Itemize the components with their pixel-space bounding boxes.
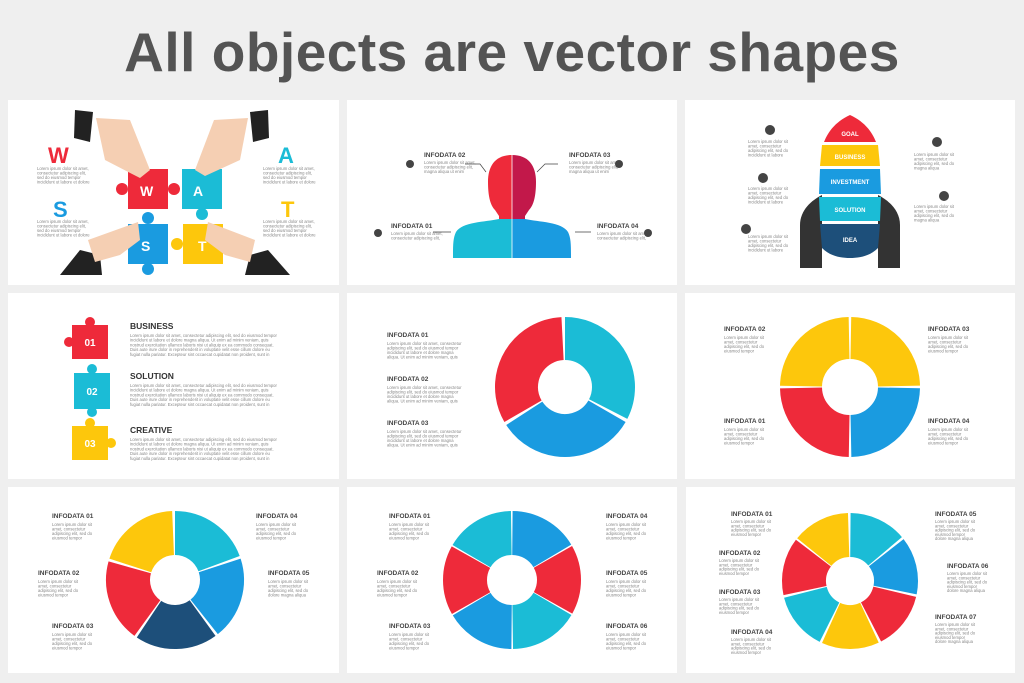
labels: INFODATA 04 — [597, 223, 639, 230]
labels: Lorem ipsum dolor sit — [928, 427, 968, 432]
labels — [38, 513, 310, 650]
labels: INFODATA 05 — [606, 570, 648, 577]
labels: INFODATA 03 — [928, 326, 970, 333]
labels: adipiscing elit, sed do — [731, 646, 772, 651]
labels: Lorem ipsum dolor sit amet, consectetur — [387, 429, 461, 434]
labels: amet, consectetur — [928, 340, 962, 344]
swot text: Lorem ipsum dolor sit amet, — [263, 166, 315, 171]
swot text — [37, 166, 316, 238]
labels: adipiscing elit, sed do — [928, 344, 969, 349]
swot text: incididunt ut labore et dolore — [37, 180, 90, 184]
labels: INFODATA 02 — [719, 550, 761, 557]
rocket text: incididunt ut labore — [748, 248, 784, 252]
swot text: incididunt ut labore et dolore — [263, 180, 316, 184]
panel: head silhouette — [347, 100, 677, 285]
labels: eiusmod tempor — [935, 532, 966, 537]
labels: INFODATA 05 — [935, 511, 977, 518]
labels: eiusmod tempor — [724, 440, 755, 446]
labels: Lorem ipsum dolor sit — [731, 637, 771, 642]
labels: eiusmod tempor — [928, 348, 959, 354]
labels: INFODATA 02 — [387, 376, 429, 383]
puzzle pieces: W — [140, 183, 154, 199]
labels: consectetur adipiscing elit, — [424, 164, 473, 170]
donut 5 — [109, 514, 241, 646]
labels: Lorem ipsum dolor sit — [935, 519, 975, 524]
labels: eiusmod tempor — [389, 646, 420, 650]
labels: Lorem ipsum dolor sit — [38, 579, 78, 584]
swot text: consectetur adipiscing elit, — [263, 170, 312, 176]
swot letters: W — [48, 143, 69, 168]
labels: Lorem ipsum dolor sit — [256, 522, 296, 527]
labels: Lorem ipsum dolor sit — [377, 579, 417, 584]
labels: INFODATA 04 — [731, 629, 773, 636]
swot text: sed do eiusmod tempor — [37, 228, 81, 233]
rocket text: amet, consectetur — [914, 156, 948, 162]
labels: adipiscing elit, sed do — [268, 588, 309, 593]
labels: eiusmod tempor — [52, 646, 83, 650]
headings and text: Duis aute irure dolor in reprehenderit in voluptate velit esse cillum dolore eu — [130, 347, 271, 352]
rocket text: magna aliqua — [914, 166, 940, 170]
labels — [719, 511, 989, 655]
labels: magna aliqua ut enim — [424, 169, 465, 174]
labels: consectetur adipiscing elit, — [569, 164, 618, 170]
rocket text — [748, 139, 955, 252]
labels: consectetur adipiscing elit, — [597, 236, 646, 240]
labels: Lorem ipsum dolor sit amet, — [391, 231, 443, 236]
labels: aliqua. Ut enim ad minim veniam, quis — [387, 398, 458, 404]
labels: INFODATA 04 — [928, 418, 970, 425]
swot text: Lorem ipsum dolor sit amet, — [37, 219, 89, 224]
puzzle pieces: S — [141, 238, 150, 254]
labels: amet, consectetur — [377, 584, 411, 588]
puzzle pieces — [116, 169, 223, 275]
labels: amet, consectetur — [389, 636, 423, 642]
rocket text: adipiscing elit, sed do — [914, 161, 955, 166]
labels: Lorem ipsum dolor sit — [935, 622, 975, 627]
labels: Lorem ipsum dolor sit — [606, 579, 646, 584]
labels: Lorem ipsum dolor sit — [731, 519, 771, 524]
headings and text: fugiat nulla pariatur. Excepteur sint occaecat cupidatat non proident, sunt in — [130, 352, 270, 357]
headings and text: nostrud exercitation ullamco laboris nisi ut aliquip ex ea commodo consequat. — [130, 342, 274, 347]
head figure — [453, 155, 571, 258]
labels: eiusmod tempor — [389, 536, 420, 540]
rocket text: adipiscing elit, sed do — [748, 243, 789, 248]
labels: amet, consectetur — [724, 432, 758, 436]
labels: INFODATA 01 — [387, 332, 429, 339]
rocket text: adipiscing elit, sed do — [748, 195, 789, 200]
headings and text: nostrud exercitation ullamco laboris nisi ut aliquip ex ea commodo consequat. — [130, 446, 274, 451]
headings and text: nostrud exercitation ullamco laboris nisi ut aliquip ex ea commodo consequat. — [130, 392, 274, 397]
swot text: consectetur adipiscing elit, — [37, 224, 86, 228]
swot text: Lorem ipsum dolor sit amet, — [263, 219, 315, 224]
labels: INFODATA 03 — [719, 589, 761, 596]
labels: aliqua. Ut enim ad minim veniam, quis — [387, 354, 458, 360]
labels: eiusmod tempor — [719, 610, 750, 615]
headings and text: incididunt ut labore et dolore magna aliqua. Ut enim ad minim veniam, quis — [130, 388, 268, 393]
labels: Lorem ipsum dolor sit — [719, 558, 759, 563]
headings and text: Lorem ipsum dolor sit amet, consectetur adipiscing elit, sed do eiusmod tempor — [130, 437, 277, 442]
panel: 6-part donut — [347, 487, 677, 673]
labels: Lorem ipsum dolor sit — [947, 571, 987, 576]
panel: 3-part donut — [347, 293, 677, 479]
panel: 7-part donut — [686, 487, 1015, 673]
labels: eiusmod tempor — [606, 536, 637, 540]
labels: dolore magna aliqua — [268, 592, 307, 598]
labels: INFODATA 06 — [947, 563, 989, 570]
labels: adipiscing elit, sed do — [606, 531, 647, 536]
labels: adipiscing elit, sed do — [935, 528, 976, 533]
rocket text: Lorem ipsum dolor sit — [914, 204, 954, 209]
labels: Lorem ipsum dolor sit — [606, 522, 646, 527]
rocket: INVESTMENT — [831, 180, 870, 186]
labels: amet, consectetur — [935, 523, 969, 528]
labels: INFODATA 03 — [569, 152, 611, 159]
labels: eiusmod tempor — [731, 650, 762, 655]
swot text: incididunt ut labore et dolore — [263, 232, 316, 238]
labels: amet, consectetur — [606, 636, 640, 642]
labels: INFODATA 05 — [268, 570, 310, 577]
swot text: consectetur adipiscing elit, — [37, 170, 86, 176]
labels: Lorem ipsum dolor sit — [52, 632, 92, 637]
headings and text: Duis aute irure dolor in reprehenderit in voluptate velit esse cillum dolore eu — [130, 397, 271, 402]
labels: dolore magna aliqua — [935, 639, 974, 644]
labels: eiusmod tempor — [606, 592, 637, 598]
rocket text: Lorem ipsum dolor sit — [748, 186, 788, 191]
labels: amet, consectetur — [606, 584, 640, 588]
labels: adipiscing elit, sed do — [724, 436, 765, 441]
labels: adipiscing elit, sed do — [38, 588, 79, 593]
swot text: sed do eiusmod tempor — [37, 175, 81, 180]
puzzle icons — [64, 317, 116, 460]
swot text: Lorem ipsum dolor sit amet, — [37, 166, 89, 171]
labels: eiusmod tempor — [947, 584, 978, 589]
rocket text: Lorem ipsum dolor sit — [748, 139, 788, 144]
labels: amet, consectetur — [731, 641, 765, 646]
swot letters: A — [278, 143, 294, 168]
labels: INFODATA 02 — [724, 326, 766, 333]
labels: Lorem ipsum dolor sit — [928, 335, 968, 340]
headings and text — [130, 321, 277, 461]
labels: adipiscing elit, sed do — [606, 588, 647, 593]
donut 3 — [499, 321, 631, 453]
labels: adipiscing elit, sed do — [389, 641, 430, 646]
panel: 5-part donut — [8, 487, 339, 673]
labels: Lorem ipsum dolor sit — [389, 632, 429, 637]
labels: Lorem ipsum dolor sit — [724, 427, 764, 432]
rocket text: Lorem ipsum dolor sit — [914, 152, 954, 157]
labels: Lorem ipsum dolor sit amet, — [424, 160, 476, 165]
rocket text: adipiscing elit, sed do — [748, 148, 789, 153]
labels: eiusmod tempor — [731, 532, 762, 537]
labels: Lorem ipsum dolor sit — [52, 522, 92, 527]
labels: eiusmod tempor — [724, 348, 755, 354]
labels: INFODATA 01 — [731, 511, 773, 518]
labels: INFODATA 02 — [424, 152, 466, 159]
labels — [387, 332, 462, 448]
labels: INFODATA 04 — [256, 513, 298, 520]
headings and text: incididunt ut labore et dolore magna aliqua. Ut enim ad minim veniam, quis — [130, 338, 268, 343]
labels: INFODATA 03 — [389, 623, 431, 630]
labels: INFODATA 02 — [377, 570, 419, 577]
labels — [724, 326, 970, 446]
labels: amet, consectetur — [52, 636, 86, 642]
labels: Lorem ipsum dolor sit amet, — [569, 160, 621, 165]
labels: eiusmod tempor — [377, 592, 408, 598]
labels: consectetur adipiscing elit, — [391, 236, 440, 240]
puzzle icons: 03 — [84, 439, 96, 450]
labels: adipiscing elit, sed do — [928, 436, 969, 441]
labels: adipiscing elit, sed do — [52, 641, 93, 646]
labels: eiusmod tempor — [928, 440, 959, 446]
swot text: sed do eiusmod tempor — [263, 228, 307, 233]
headings and text: SOLUTION — [130, 371, 174, 381]
labels: adipiscing elit, sed do — [947, 580, 988, 585]
labels: INFODATA 03 — [387, 420, 429, 427]
labels — [374, 152, 652, 240]
labels: incididunt ut labore et dolore magna — [387, 394, 454, 399]
puzzle pieces: A — [193, 183, 203, 199]
labels: adipiscing elit, sed do — [935, 631, 976, 636]
labels: incididunt ut labore et dolore magna — [387, 350, 454, 355]
labels: incididunt ut labore et dolore magna — [387, 438, 454, 443]
labels: dolore magna aliqua — [935, 536, 974, 541]
labels: amet, consectetur — [268, 584, 302, 588]
labels: amet, consectetur — [719, 601, 753, 606]
hands — [60, 110, 290, 275]
donut 4 — [800, 337, 900, 437]
labels: adipiscing elit, sed do — [731, 528, 772, 533]
title: All objects are vector shapes — [124, 21, 900, 83]
labels: INFODATA 02 — [38, 570, 80, 577]
rocket — [800, 115, 900, 268]
rocket: BUSINESS — [835, 155, 865, 161]
labels: amet, consectetur — [731, 523, 765, 528]
rocket text: amet, consectetur — [748, 144, 782, 148]
labels: Lorem ipsum dolor sit amet, consectetur — [387, 341, 461, 346]
labels: INFODATA 01 — [391, 223, 433, 230]
headings and text: fugiat nulla pariatur. Excepteur sint occaecat cupidatat non proident, sunt in — [130, 456, 270, 461]
labels: Lorem ipsum dolor sit amet, — [597, 231, 649, 236]
donut 7 — [785, 516, 915, 646]
panel: 4-part donut — [685, 293, 1015, 479]
labels: adipiscing elit, sed do eiusmod tempor — [387, 434, 459, 438]
labels: amet, consectetur — [947, 575, 981, 580]
labels: amet, consectetur — [38, 584, 72, 588]
labels: amet, consectetur — [724, 340, 758, 344]
labels: adipiscing elit, sed do — [606, 641, 647, 646]
rocket: IDEA — [843, 238, 858, 244]
labels: Lorem ipsum dolor sit — [724, 335, 764, 340]
swot text: sed do eiusmod tempor — [263, 175, 307, 180]
labels: adipiscing elit, sed do — [377, 588, 418, 593]
puzzle icons: 01 — [84, 338, 96, 349]
labels: amet, consectetur — [389, 526, 423, 532]
rocket text: incididunt ut labore — [748, 200, 784, 204]
labels: INFODATA 04 — [606, 513, 648, 520]
labels: INFODATA 01 — [389, 513, 431, 520]
labels: eiusmod tempor — [606, 646, 637, 650]
labels: adipiscing elit, sed do — [724, 344, 765, 349]
labels: adipiscing elit, sed do — [719, 606, 760, 611]
rocket text: amet, consectetur — [748, 238, 782, 244]
labels: eiusmod tempor — [256, 536, 287, 540]
labels: adipiscing elit, sed do — [719, 567, 760, 572]
labels: Lorem ipsum dolor sit — [389, 522, 429, 527]
labels: amet, consectetur — [928, 432, 962, 436]
swot text: consectetur adipiscing elit, — [263, 224, 312, 228]
swot letters: S — [53, 197, 68, 222]
labels: INFODATA 01 — [724, 418, 766, 425]
labels: amet, consectetur — [256, 526, 290, 532]
rocket text: incididunt ut labore — [748, 152, 784, 158]
swot text: incididunt ut labore et dolore — [37, 232, 90, 238]
labels: INFODATA 07 — [935, 614, 977, 621]
labels: eiusmod tempor — [719, 571, 750, 576]
puzzle pieces: T — [198, 238, 207, 254]
headings and text: Lorem ipsum dolor sit amet, consectetur adipiscing elit, sed do eiusmod tempor — [130, 383, 277, 388]
swot letters: T — [281, 197, 295, 222]
rocket text: magna aliqua — [914, 218, 940, 222]
labels: Lorem ipsum dolor sit — [268, 579, 308, 584]
labels: adipiscing elit, sed do eiusmod tempor — [387, 390, 459, 394]
labels: eiusmod tempor — [52, 536, 83, 540]
labels: amet, consectetur — [719, 562, 753, 567]
labels: eiusmod tempor — [935, 635, 966, 640]
headings and text: fugiat nulla pariatur. Excepteur sint occaecat cupidatat non proident, sunt in — [130, 402, 270, 407]
labels: INFODATA 03 — [52, 623, 94, 630]
rocket text: Lorem ipsum dolor sit — [748, 234, 788, 239]
labels: amet, consectetur — [52, 526, 86, 532]
labels: INFODATA 01 — [52, 513, 94, 520]
labels: Lorem ipsum dolor sit — [606, 632, 646, 637]
labels: magna aliqua ut enim — [569, 169, 610, 174]
swot letters — [48, 143, 295, 222]
headings and text: BUSINESS — [130, 321, 174, 331]
puzzle icons: 02 — [86, 387, 98, 398]
labels: adipiscing elit, sed do — [389, 531, 430, 536]
labels: eiusmod tempor — [38, 592, 69, 598]
rocket text: adipiscing elit, sed do — [914, 213, 955, 218]
labels — [377, 513, 648, 650]
labels: Lorem ipsum dolor sit — [719, 597, 759, 602]
headings and text: incididunt ut labore et dolore magna aliqua. Ut enim ad minim veniam, quis — [130, 442, 268, 447]
labels: dolore magna aliqua — [947, 588, 986, 593]
donut 6 — [448, 516, 576, 644]
labels: adipiscing elit, sed do — [52, 531, 93, 536]
headings and text: Duis aute irure dolor in reprehenderit in voluptate velit esse cillum dolore eu — [130, 451, 271, 456]
labels: adipiscing elit, sed do eiusmod tempor — [387, 346, 459, 350]
rocket text: amet, consectetur — [748, 190, 782, 196]
headings and text: Lorem ipsum dolor sit amet, consectetur adipiscing elit, sed do eiusmod tempor — [130, 333, 277, 338]
labels: aliqua. Ut enim ad minim veniam, quis — [387, 442, 458, 448]
labels: Lorem ipsum dolor sit amet, consectetur — [387, 385, 461, 390]
rocket: SOLUTION — [834, 208, 866, 214]
labels: adipiscing elit, sed do — [256, 531, 297, 536]
labels: amet, consectetur — [606, 526, 640, 532]
panel: SWOT puzzle hands — [8, 100, 339, 285]
headings and text: CREATIVE — [130, 425, 173, 435]
labels: amet, consectetur — [935, 626, 969, 631]
labels: INFODATA 06 — [606, 623, 648, 630]
rocket text: amet, consectetur — [914, 208, 948, 214]
panel: business solution creative — [8, 293, 339, 479]
panel: rocket — [685, 100, 1015, 285]
rocket: GOAL — [841, 132, 859, 138]
